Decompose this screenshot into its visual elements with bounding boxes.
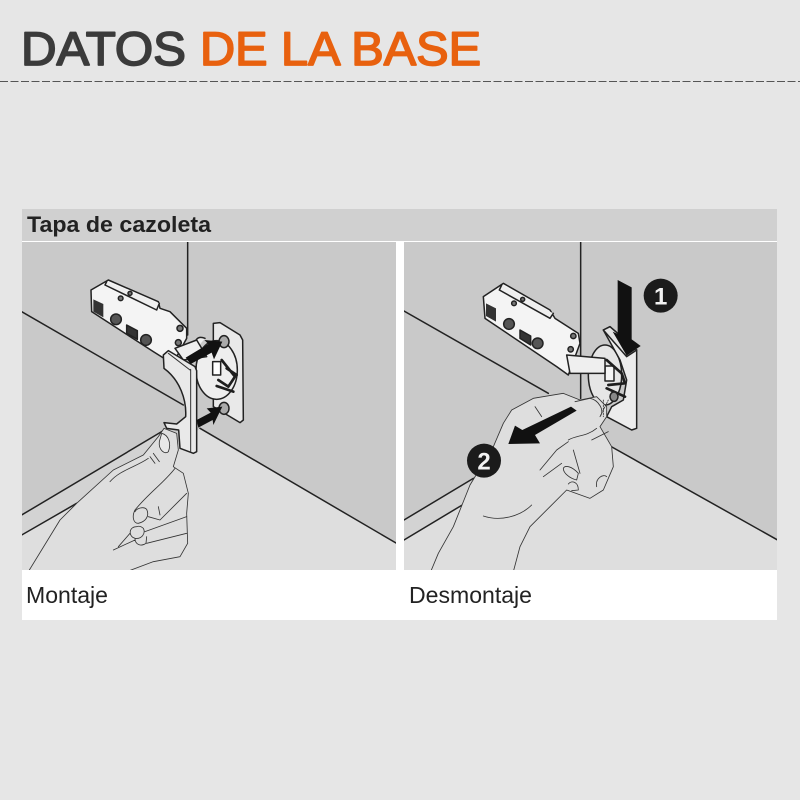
hinge arm bbox=[91, 280, 207, 360]
infographic canvas bbox=[0, 31, 800, 620]
illustration: dismounting bbox=[404, 240, 777, 573]
floor bbox=[404, 445, 777, 573]
cover cap bbox=[163, 351, 197, 453]
hand bbox=[430, 393, 613, 573]
arrow 2: pull out bbox=[508, 407, 577, 444]
caption: Desmontaje: Desmontaje bbox=[409, 582, 532, 608]
floor bbox=[22, 428, 396, 573]
illustration: mounting bbox=[22, 240, 396, 573]
section heading bar: Tapa de cazoleta bbox=[27, 212, 211, 237]
hinge arm bbox=[483, 283, 605, 375]
badge 2: 2 bbox=[477, 448, 491, 475]
title: DATOS bbox=[21, 22, 186, 75]
arrow 1: press down bbox=[613, 280, 641, 356]
section panel bbox=[22, 209, 777, 620]
badge 1: 1 bbox=[654, 283, 667, 310]
title bbox=[21, 22, 481, 75]
hinge plate bbox=[195, 323, 243, 423]
hand bbox=[28, 428, 188, 572]
hinge plate bbox=[588, 327, 637, 430]
title: DE LA BASE bbox=[200, 22, 481, 75]
arrows: towards screw holes bbox=[186, 340, 222, 428]
badge 2 bbox=[467, 444, 501, 478]
badge 1 bbox=[644, 279, 678, 313]
caption: Montaje: Montaje bbox=[26, 582, 108, 608]
section heading bar bbox=[22, 209, 777, 241]
